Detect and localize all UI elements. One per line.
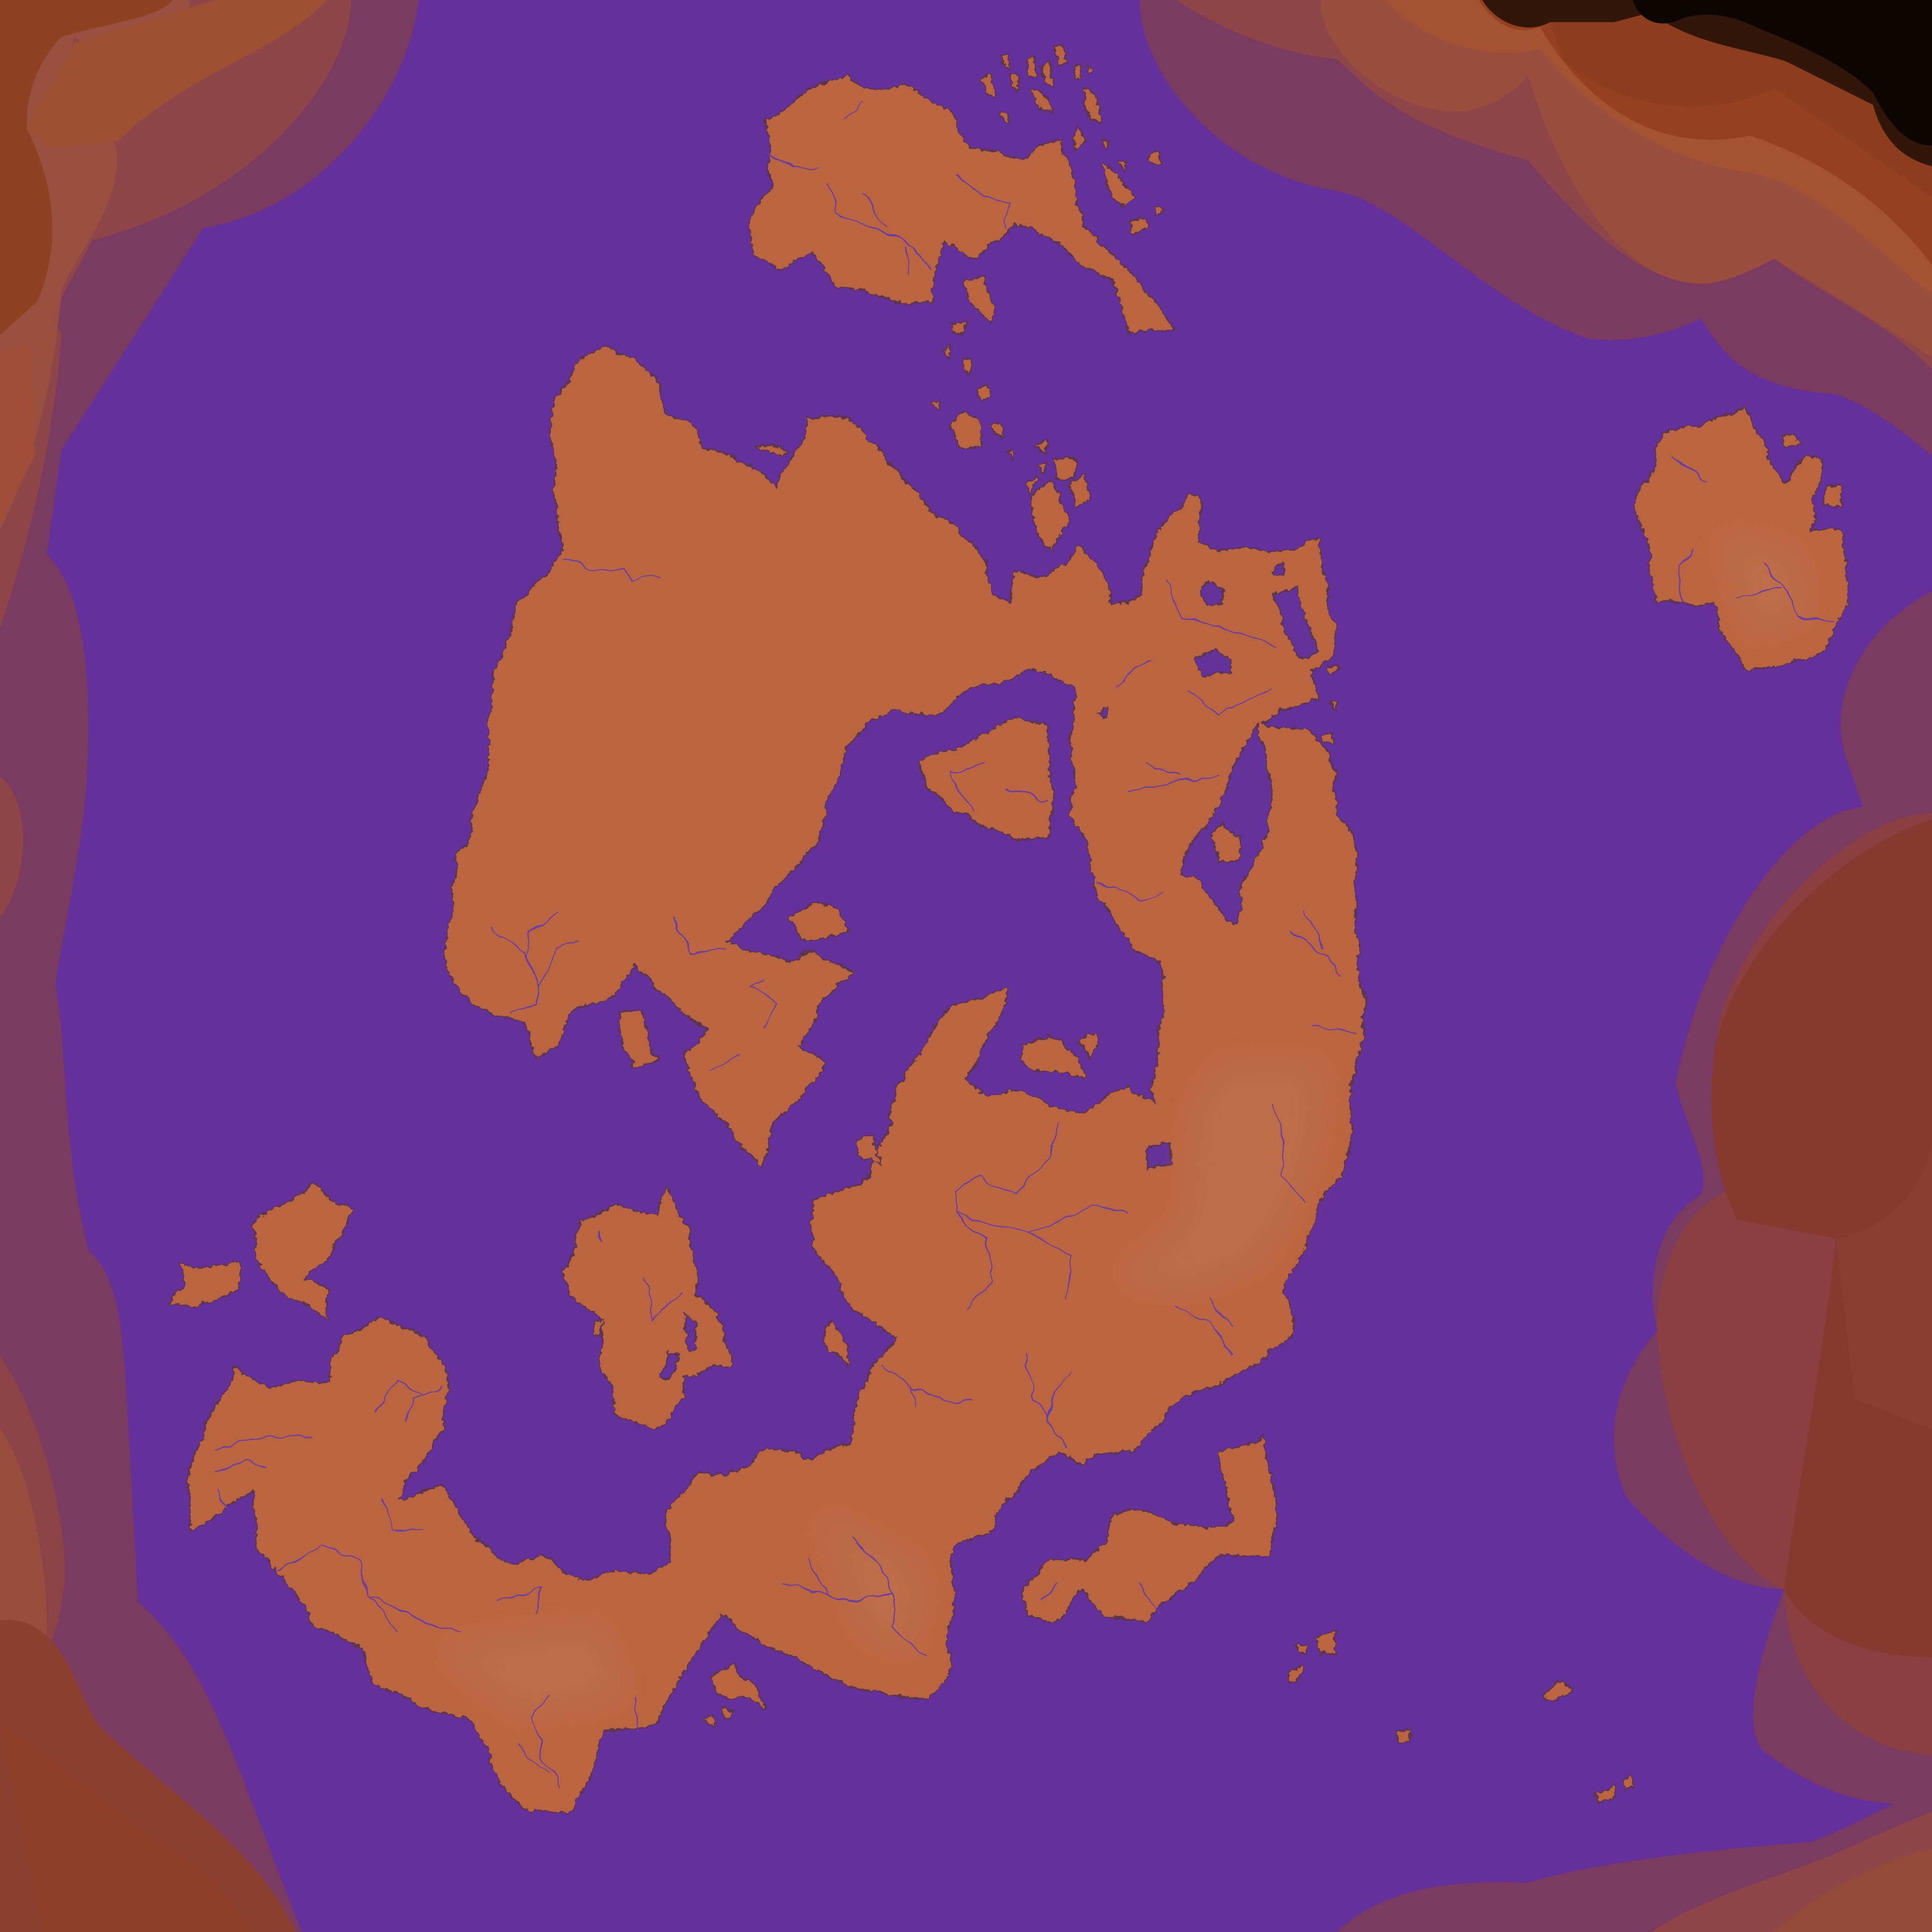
small islands near central west: [822, 1316, 850, 1365]
inner bay island: [918, 715, 1053, 841]
small island beside bay: [789, 899, 850, 942]
western isles: [253, 1183, 354, 1318]
central south-west island: [564, 1185, 729, 1433]
island in central bay: [1023, 1033, 1087, 1075]
small island beside peninsula: [618, 1010, 662, 1066]
central island channels: [685, 1312, 698, 1353]
northern archipelago chain: [949, 410, 981, 449]
inland sea: [1177, 727, 1272, 924]
east island: [1636, 407, 1848, 672]
edge clouds: top right: [1140, 0, 1932, 456]
island in inland sea: [1214, 823, 1242, 865]
northern scattered isles: [980, 76, 993, 95]
edge clouds: right side: [1614, 591, 1932, 1803]
terrain highlights: [431, 530, 1811, 1719]
edge clouds: left side: [0, 0, 419, 1932]
far south-east islets: [1315, 1634, 1337, 1654]
north island: [749, 76, 1173, 330]
south-east archipelago: [1020, 1435, 1279, 1624]
main continent: [185, 345, 1368, 1811]
lakes: [1201, 579, 1225, 608]
edge clouds: bottom right: [1337, 1787, 1932, 1932]
east coast islets: [1826, 483, 1843, 503]
south isle: [712, 1664, 764, 1705]
rivers: [216, 101, 1836, 1787]
landmasses: [167, 47, 1848, 1811]
